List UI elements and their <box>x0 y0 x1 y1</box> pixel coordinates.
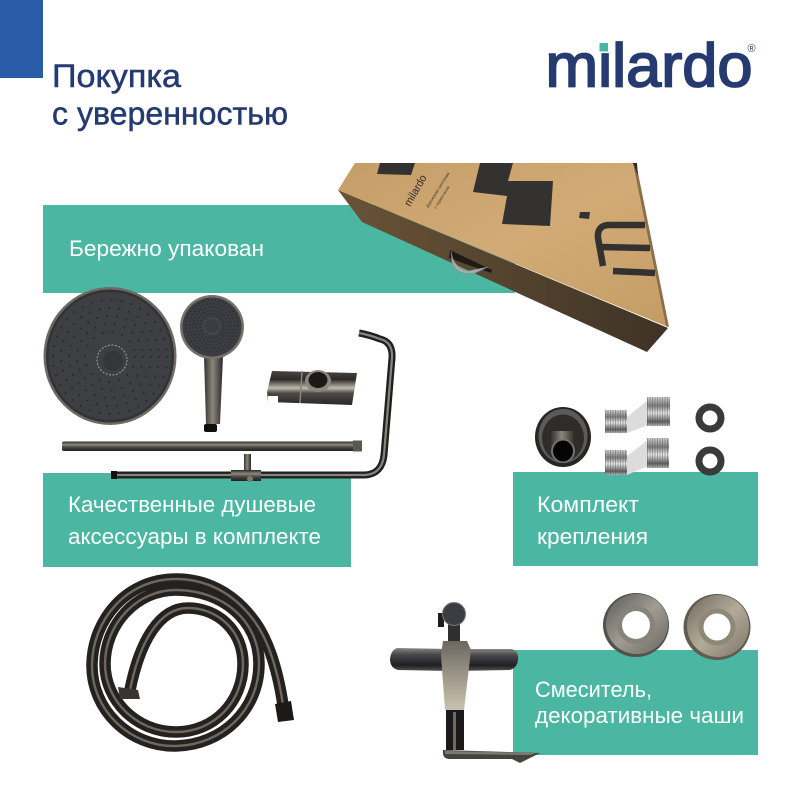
image: rain shower head <box>44 287 176 425</box>
title <box>52 58 288 132</box>
title: с уверенностью <box>52 96 288 132</box>
image: shower hose <box>92 579 294 746</box>
panel: mounting kit: крепления <box>537 524 648 549</box>
logo: milardo: milardo <box>546 32 752 100</box>
title: Покупка <box>52 58 181 94</box>
image: slide holder <box>267 370 357 405</box>
panel: mounting kit <box>513 472 758 566</box>
panel: mixer and decorative cups <box>513 650 758 755</box>
image: packaging box: Душевая система <box>425 170 451 209</box>
logo: milardo: ® <box>748 43 756 55</box>
image: riser with diverter <box>111 333 392 482</box>
panel: shower accessories: аксессуары в комплекте <box>68 524 321 549</box>
image: packaging box: milardo <box>402 173 430 208</box>
image: packaging box: с термостатом <box>433 185 451 210</box>
panel: mixer and decorative cups: декоративные чаши <box>535 703 744 728</box>
image: packaging box <box>338 163 669 352</box>
panel: carefully packed: Бережно упакован <box>69 236 264 261</box>
panel: mixer and decorative cups: Смеситель, <box>535 677 652 702</box>
blue corner block <box>0 0 43 78</box>
image: rubber washers <box>699 407 721 472</box>
panel: carefully packed <box>43 205 515 293</box>
panel: shower accessories <box>43 473 351 567</box>
image: decorative cups <box>603 593 750 660</box>
panel: mounting kit: Комплект <box>537 492 639 517</box>
image: bath mixer <box>390 602 540 763</box>
image: lower shower rod <box>62 440 362 452</box>
panel: shower accessories: Качественные душевые <box>68 492 316 517</box>
image: hand shower <box>180 295 244 432</box>
image: threaded elbows <box>605 397 670 475</box>
image: mounting flange <box>535 407 591 467</box>
